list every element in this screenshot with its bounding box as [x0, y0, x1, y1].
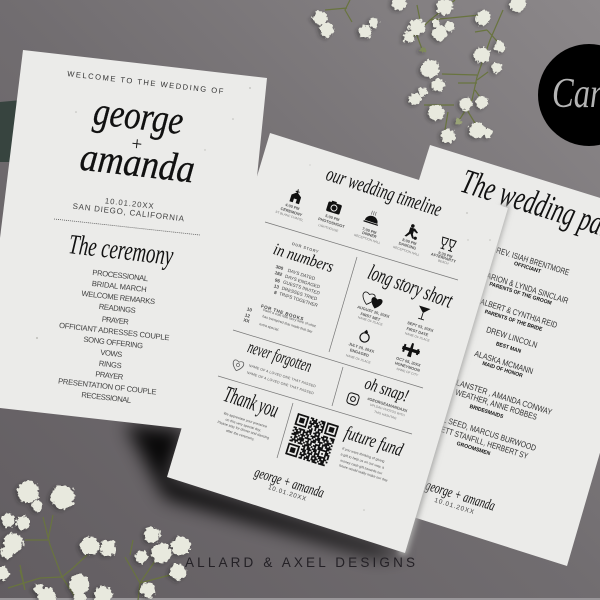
panel: for the books: XX: [243, 317, 251, 324]
timeline item: ceremony: ST BLANC CHAPEL: [275, 210, 304, 222]
stat rows: GUESTS INVITED: [282, 279, 321, 296]
panel: for the books: extra special.: [259, 322, 280, 332]
footer date: 10.01.20XX: [433, 497, 476, 516]
panel: for the books: Insert a cute little story here of what: [262, 308, 316, 328]
panel: our story in numbers: OUR STORY: [291, 241, 320, 254]
panel: oh snap: [346, 373, 411, 421]
panel: long story short: ENGAGED: [349, 347, 370, 358]
entry: parents of the groom: MARION & LYNDA SINCLAIR: [480, 269, 570, 306]
timeline item: dancing: [393, 223, 421, 257]
ceremony order list: PRESENTATION OF COUPLE: [58, 376, 157, 397]
dividers: [218, 222, 458, 458]
panel: for the books: [243, 303, 316, 334]
entry: parents of the bride: PARENTS OF THE BRIDE: [484, 309, 543, 333]
icon: cloche: [363, 209, 382, 226]
entry: maid of honor: MAID OF HONOR: [481, 361, 523, 379]
panel: long story short: NAME OF PLACE: [357, 315, 383, 327]
blossoms: [313, 0, 526, 143]
panel: oh snap: #GEORGEAMANDAXX: [367, 396, 408, 413]
entry: groomsmen: L SEED, MARCUS BURWOOD: [442, 414, 537, 453]
names: george + amanda: +: [129, 133, 144, 156]
footer date: 10.01.20XX: [267, 484, 308, 503]
names: george + amanda: amanda: [78, 134, 197, 191]
panel: long story short: HONEYMOON: [394, 360, 421, 373]
panel: long story short: OCT 05, 20XX: [396, 355, 422, 368]
ceremony order list: PROCESSIONAL: [92, 268, 149, 283]
panel: long story short: NAME OF PLACE: [345, 353, 371, 365]
panel: thank you: Thank you: [221, 381, 282, 422]
entry: officiant: OFFICIANT: [513, 261, 542, 275]
timeline item: dancing: RECEPTION HALL: [393, 245, 420, 257]
icon: champagne glasses: [440, 237, 456, 252]
stems: [8, 515, 170, 600]
stat rows: 8: [273, 290, 278, 295]
icon: dancers: [404, 223, 421, 240]
stat rows: 13: [273, 283, 280, 290]
timeline item: dancing: 8:00 PM: [402, 237, 417, 246]
icon: heart with circle: [231, 359, 244, 372]
panel: thank you: We appreciate your presence: [223, 411, 268, 429]
panel: future fund: future fund: [342, 423, 406, 461]
panel: long story short: long story short: [365, 259, 457, 313]
ceremony order list: [58, 268, 170, 405]
entry: best man: BEST MAN: [495, 341, 522, 355]
panel: long story short: JULY 20, 20XX: [348, 341, 375, 354]
badge: canva: [538, 44, 600, 146]
panel: oh snap: oh snap!: [362, 373, 411, 406]
panel: thank you: on this very special day.: [225, 418, 262, 433]
panel: thank you: Please stay for dinner and dancing: [217, 420, 270, 440]
panel: thank you: after the ceremony.: [225, 429, 255, 441]
timeline item: dinner: [354, 209, 382, 245]
panel: oh snap: UPLOAD PHOTOS WITH: [369, 403, 406, 418]
panel: future fund: [339, 423, 406, 483]
timeline item: afterparty: AFTERPARTY: [430, 251, 457, 264]
panel: long story short: NAME OF CITY: [396, 367, 420, 378]
speckles: [36, 87, 251, 339]
flowers: bottom-left sprig: [0, 481, 190, 600]
panel: long story short: AUGUST 20, 20XX: [357, 304, 391, 319]
entry: parents of the bride: ALBERT & CYNTHIA REID: [479, 296, 559, 330]
ceremony order list: SONG OFFERING: [83, 335, 144, 350]
names: george + amanda: george: [91, 88, 186, 143]
location: SAN DIEGO, CALIFORNIA: [72, 202, 185, 223]
entry: officiant: REV. ISIAH BRENTMORE: [495, 245, 571, 277]
panel: for the books: 12: [244, 312, 251, 319]
entry: groomsmen: GROOMSMEN: [456, 441, 491, 457]
brand line: ALLARD & AXEL DESIGNS: [185, 555, 415, 570]
timeline item: ceremony: CEREMONY: [280, 206, 303, 217]
flowers: top sprig: [313, 0, 526, 143]
footer names: george + amanda: [423, 478, 497, 515]
timeline item: afterparty: [430, 237, 457, 266]
card sheet: [167, 133, 508, 553]
panel: our story in numbers: in numbers: [271, 239, 336, 276]
stat rows: 182: [274, 270, 283, 277]
panel: long story short: NAME OF PLACE: [404, 331, 430, 343]
panel: future fund: If you were thinking of giving: [342, 446, 385, 464]
icon: camera: [326, 200, 343, 215]
icon: ring: [359, 328, 371, 343]
timeline item: photoshoot: PHOTOSHOOT: [318, 216, 346, 229]
stat rows: TRIPS TOGETHER: [279, 291, 319, 308]
timeline item: dinner: RECEPTION HALL: [354, 233, 381, 245]
timeline item: photoshoot: LIGHTHOUSE: [318, 223, 339, 233]
bottom edge highlight: [0, 598, 600, 600]
card: welcome and ceremony (left): [0, 50, 267, 434]
timeline item: photoshoot: [318, 200, 346, 233]
stat rows: DRESSES TRIED: [281, 286, 318, 302]
eucalyptus leaf at left edge: [0, 100, 22, 162]
card: wedding party (back right): [322, 145, 600, 566]
timeline item: ceremony: [275, 188, 304, 222]
footer names: george + amanda: [252, 465, 326, 502]
stems: [325, 0, 505, 130]
ceremony order list: RECESSIONAL: [81, 390, 132, 405]
QR code: [285, 413, 339, 467]
timeline item: afterparty: BEACH: [437, 258, 450, 266]
panel: never forgotten: NAME OF A LOVED ONE THAT PASSED: [248, 364, 317, 389]
card: wedding timeline (center): [167, 133, 508, 553]
entry: maid of honor: ALASKA MCMANN: [473, 348, 534, 376]
panel: for the books: 10: [246, 306, 253, 313]
stat rows: 300: [275, 264, 284, 271]
panel: long story short: FIRST DATE: [406, 326, 429, 337]
panel: our story in numbers: [271, 239, 336, 308]
ceremony order list: VOWS: [100, 348, 123, 359]
stat rows: [273, 264, 321, 308]
icon: cocktail: [415, 305, 431, 321]
panel: long story short: SEPT 03, 20XX: [407, 320, 435, 333]
shadow of timeline card on neighbouring cards: [398, 205, 510, 555]
speckles: [309, 164, 491, 511]
panel: future fund: future would really make our day: [339, 464, 388, 483]
entry: bridesmaids: WEATHER, ANNE ROBBES: [454, 387, 539, 422]
card sheet: [322, 145, 600, 566]
ceremony order list: READINGS: [98, 302, 136, 315]
panel: never forgotten: NAME OF A LOVED ONE THAT PASSED: [246, 371, 315, 396]
panel: future fund: money cash gift towards our: [340, 459, 384, 476]
welcome line: WELCOME TO THE WEDDING OF: [67, 69, 224, 96]
stat rows: DAYS ENGAGED: [284, 274, 321, 290]
ceremony order list: RINGS: [98, 359, 122, 370]
icon: airplane: [400, 341, 422, 359]
heading: the ceremony: The ceremony: [67, 229, 175, 272]
timeline item: dinner: 7:00 PM: [362, 226, 377, 235]
panel: for the books: has transpired that made that day: [262, 314, 313, 334]
panel: never forgotten: never forgotten: [245, 337, 314, 376]
entry: bridesmaids: LANSTER , AMANDA CONWAY: [455, 377, 554, 417]
ceremony order list: BRIDAL MARCH: [91, 279, 147, 294]
dotted divider: [54, 219, 200, 235]
shadow beneath cards: [125, 424, 405, 556]
timeline item: afterparty: 9:30 PM: [438, 250, 453, 259]
date: 10.01.20XX: [104, 196, 155, 211]
timeline item: dinner: DINNER: [362, 230, 377, 239]
ceremony order list: OFFICIANT ADRESSES COUPLE: [59, 321, 170, 342]
panel: thank you: [217, 381, 282, 441]
stat rows: DAYS DATED: [287, 268, 317, 281]
names: george + amanda: [78, 88, 197, 191]
panel: never forgotten: [231, 337, 317, 396]
ceremony order list: PRAYER: [95, 369, 124, 382]
entry: officiant: [495, 245, 571, 277]
panel: long story short: [345, 259, 457, 378]
ceremony order list: PRAYER: [101, 315, 130, 327]
entry: best man: DREW LINCOLN: [485, 324, 539, 350]
blossoms: [0, 481, 190, 600]
entry: groomsmen: ETT STANFILL, HERBERT SY: [440, 424, 530, 461]
timeline item: dancing: DANCING: [398, 240, 417, 251]
timeline item: ceremony: 4:00 PM: [285, 202, 300, 211]
icon: chapel: [289, 188, 303, 204]
icon: two hearts: [360, 291, 384, 310]
card sheet: [0, 50, 267, 434]
panel: oh snap: THIS HASHTAG: [374, 410, 398, 421]
icon: instagram: [346, 392, 360, 406]
panel: long story short: FIRST MET: [360, 311, 382, 322]
heading: our wedding timeline: our wedding timeline: [323, 161, 445, 221]
panel: future fund: a gift to help us on our way, a: [340, 452, 385, 470]
stat rows: 96: [274, 277, 281, 284]
entry: bridesmaids: BRIDESMAIDS: [469, 404, 504, 420]
timeline item: photoshoot: 5:00 PM: [325, 213, 340, 222]
ceremony order list: WELCOME REMARKS: [81, 289, 156, 306]
panel: for the books: FOR THE BOOKS: [260, 303, 305, 322]
entry: parents of the groom: PARENTS OF THE GROOM: [488, 281, 553, 307]
